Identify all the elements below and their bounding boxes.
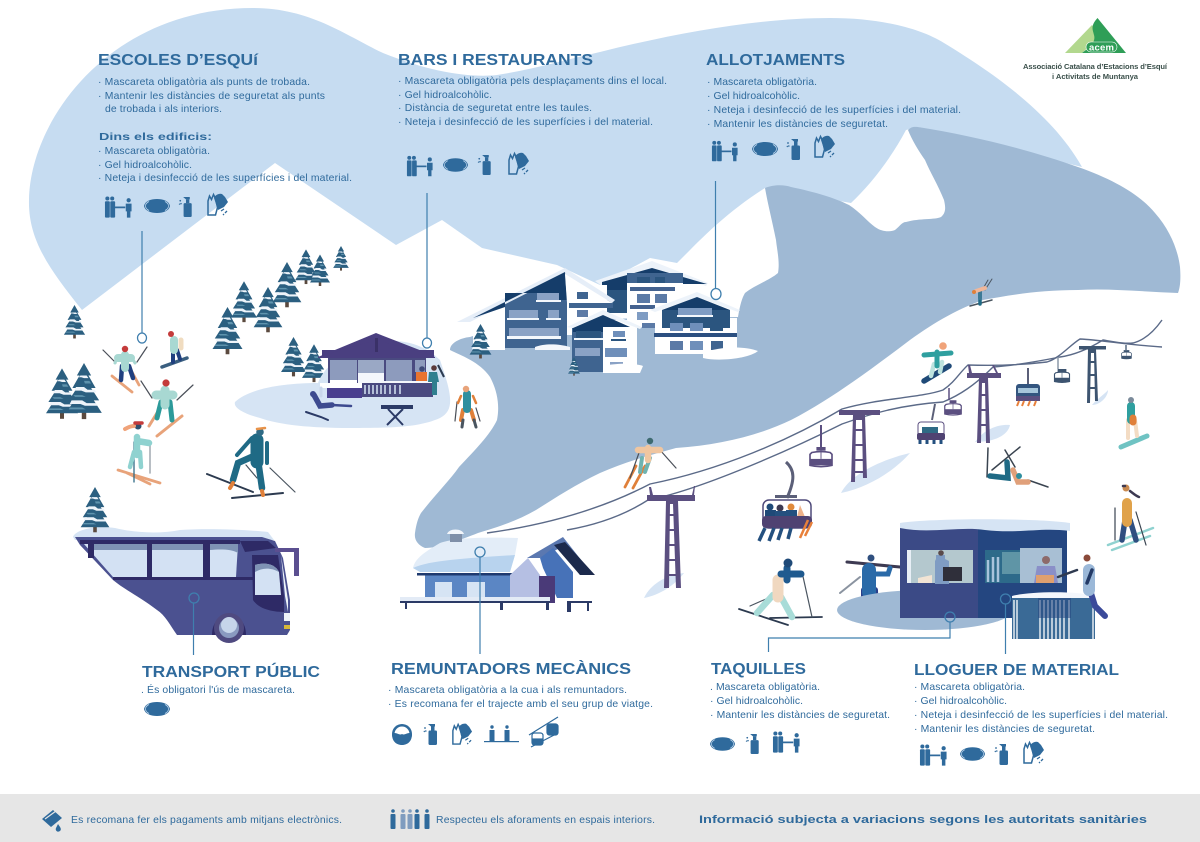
text block: · Mascareta obligatòria. <box>98 146 210 157</box>
windshield <box>252 555 284 612</box>
callout line: allotjaments <box>711 181 721 300</box>
skier: teal suit <box>141 379 193 436</box>
icon: group of people <box>390 809 430 829</box>
text block <box>398 76 667 128</box>
wheel <box>212 613 246 643</box>
callout line: taquilles <box>768 612 955 652</box>
snow patch under the bar <box>235 341 450 428</box>
text block: · Distància de seguretat entre les taules. <box>398 103 592 114</box>
text block: de trobada i als interiors. <box>105 104 222 115</box>
text block: · Es recomana fer el trajecte amb el seu grup de viatge. <box>388 699 653 710</box>
chalet: back centre <box>595 261 708 328</box>
skier: small on the ridge <box>970 279 992 306</box>
trees: forest on the left slope <box>46 246 349 419</box>
bus <box>73 527 299 643</box>
background: mid-blue ski run <box>415 127 1180 548</box>
skiers and riders on the right slope <box>625 279 1153 625</box>
building left: ticket office <box>900 528 978 618</box>
text block: · Gel hidroalcohòlic. <box>914 696 1007 707</box>
chairlift: gondola cabins <box>810 345 1131 467</box>
footer band <box>0 794 1200 842</box>
background: sky shape <box>29 8 1082 310</box>
heading: REMUNTADORS MECÀNICS <box>391 661 631 678</box>
icon: gondolas <box>529 717 558 747</box>
skier: mint jacket <box>103 346 147 392</box>
chairlift: large chair with passengers <box>759 462 812 541</box>
heading: BARS I RESTAURANTS <box>398 52 593 69</box>
tree: behind the bus <box>81 487 109 532</box>
icons <box>407 153 529 176</box>
chairlift: cables <box>487 320 1162 533</box>
text block: · Neteja i desinfecció de les superfícies i del material. <box>398 117 653 128</box>
text block: · Gel hidroalcohòlic. <box>98 160 192 171</box>
callout line: escoles d'esquí <box>138 231 146 343</box>
text block: · Mascareta obligatòria pels desplaçaments dins el local. <box>398 76 667 87</box>
text block: · Mantenir les distàncies de seguretat als punts <box>98 91 325 102</box>
text block: · Mascareta obligatòria als punts de trobada. <box>98 77 310 88</box>
logo mountain: acem <box>1089 42 1114 54</box>
text block: · Mascareta obligatòria a la cua i als remuntadors. <box>388 685 627 696</box>
callout line: lloguer de material <box>1000 594 1010 654</box>
building right: rental shop <box>978 528 1067 618</box>
trees: beside the chalets <box>470 324 580 376</box>
skier: woman in mint <box>118 422 160 484</box>
snowboarder: woman with teal board <box>1121 397 1147 447</box>
roof band <box>80 540 240 544</box>
chairlift: small chairs <box>917 368 1040 444</box>
people at the terrace <box>416 365 444 395</box>
note: electronic payments: Es recomana fer els pagaments amb mitjans electrònics. <box>71 815 342 826</box>
heading: TAQUILLES <box>711 661 806 678</box>
skier: on the blue run <box>625 438 676 488</box>
skier: dark teal striped <box>207 428 295 498</box>
tower 4 <box>1079 346 1106 403</box>
text block: · Neteja i desinfecció de les superfícies i del material. <box>98 173 352 184</box>
text block <box>914 682 1168 735</box>
buildings: central apartment chalets <box>457 261 758 373</box>
panel: allotjaments <box>706 52 961 161</box>
snow above the bus <box>73 527 274 540</box>
side house <box>510 537 595 603</box>
person on deck chair <box>306 388 351 420</box>
heading: TRANSPORT PÚBLIC <box>142 663 320 681</box>
chalet: back left <box>457 268 615 350</box>
callout line: transport públic <box>189 593 199 655</box>
tower 3 <box>967 365 1001 443</box>
text block: · Neteja i desinfecció de les superfícies i del material. <box>914 710 1168 721</box>
text block <box>707 77 961 130</box>
text block <box>98 77 352 184</box>
logo caption: Associació Catalana d’Estacions d’Esquí <box>1023 62 1168 71</box>
logo mountain <box>1065 18 1126 54</box>
snowboarder: mint backpack <box>162 331 187 367</box>
text block: · Mantenir les distàncies de seguretat. <box>914 724 1095 735</box>
callout line: bars i restaurants <box>422 193 432 348</box>
text block <box>388 685 653 710</box>
text block: Dins els edificis: <box>99 132 212 143</box>
lift station <box>400 530 595 612</box>
icon: card payment <box>42 810 62 832</box>
text block: · Mascareta obligatòria. <box>707 77 817 88</box>
note: capacity: Respecteu els aforaments en espais interiors. <box>436 815 655 826</box>
snow on the roof <box>900 519 1070 531</box>
logo: ACEM: i Activitats de Muntanya <box>1052 72 1139 81</box>
chairlift: tower shadows <box>644 390 1108 598</box>
icons <box>920 742 1044 766</box>
text block: . Mascareta obligatòria. <box>710 682 820 693</box>
tower 2 <box>839 410 880 482</box>
icons <box>710 731 800 754</box>
platform <box>400 597 592 612</box>
fence <box>1012 592 1095 639</box>
icons <box>392 717 558 747</box>
chairlift: towers <box>647 346 1106 588</box>
icon: people queue with distance <box>484 725 519 742</box>
station building <box>413 530 523 598</box>
customer at the rental counter <box>1058 554 1105 616</box>
callout line: remuntadors mecànics <box>475 547 485 654</box>
text block: · Gel hidroalcohòlic. <box>398 90 492 101</box>
snowboarder: mint and orange <box>924 342 951 381</box>
mirror <box>275 548 299 576</box>
panel: bars i restaurants <box>398 52 667 176</box>
chalet: front right <box>650 292 758 360</box>
panel: lloguer de material <box>914 662 1168 766</box>
bus windows <box>84 544 253 580</box>
icon: face with mask <box>392 724 412 745</box>
text block: · Neteja i desinfecció de les superfícies i del material. <box>707 105 961 116</box>
chalet: front centre <box>567 310 643 373</box>
panel: escoles d'esquí <box>98 52 352 218</box>
text block: · Gel hidroalcohòlic. <box>707 91 800 102</box>
ticket booth and rental shop <box>837 519 1105 639</box>
heading: LLOGUER DE MATERIAL <box>914 662 1119 679</box>
text block: · Mascareta obligatòria. <box>914 682 1025 693</box>
text block <box>710 682 890 721</box>
bus body <box>75 537 290 635</box>
text: . És obligatori l'ús de mascareta. <box>141 683 295 696</box>
text block: · Mantenir les distàncies de seguretat. <box>707 119 888 130</box>
skier: carrying skis at the booth <box>840 554 900 618</box>
skiers on the left slope <box>103 331 480 498</box>
skier: near the bar <box>455 386 480 427</box>
heading: ALLOTJAMENTS <box>706 52 845 69</box>
fallen skier <box>987 447 1048 487</box>
skier: dark hood <box>739 558 822 625</box>
heading: ESCOLES D’ESQUí <box>98 52 259 69</box>
text block: · Mantenir les distàncies de seguretat. <box>710 710 890 721</box>
tower 1 <box>647 486 695 588</box>
panel: remuntadors mecànics <box>388 661 653 747</box>
table <box>381 405 413 425</box>
skier: yellow jacket <box>1108 484 1153 550</box>
text block: · Gel hidroalcohòlic. <box>710 696 803 707</box>
panel: taquilles <box>710 661 890 754</box>
note: disclaimer: Informació subjecta a variacions segons les autoritats sanitàries <box>699 814 1147 826</box>
icons <box>105 194 228 218</box>
building: bar and restaurant chalet <box>306 333 444 425</box>
shadow under the booth <box>837 590 1013 630</box>
logo: ACEM <box>1023 18 1168 81</box>
panel: transport públic <box>141 663 320 716</box>
icons <box>712 136 835 161</box>
icon: mask <box>144 702 170 716</box>
